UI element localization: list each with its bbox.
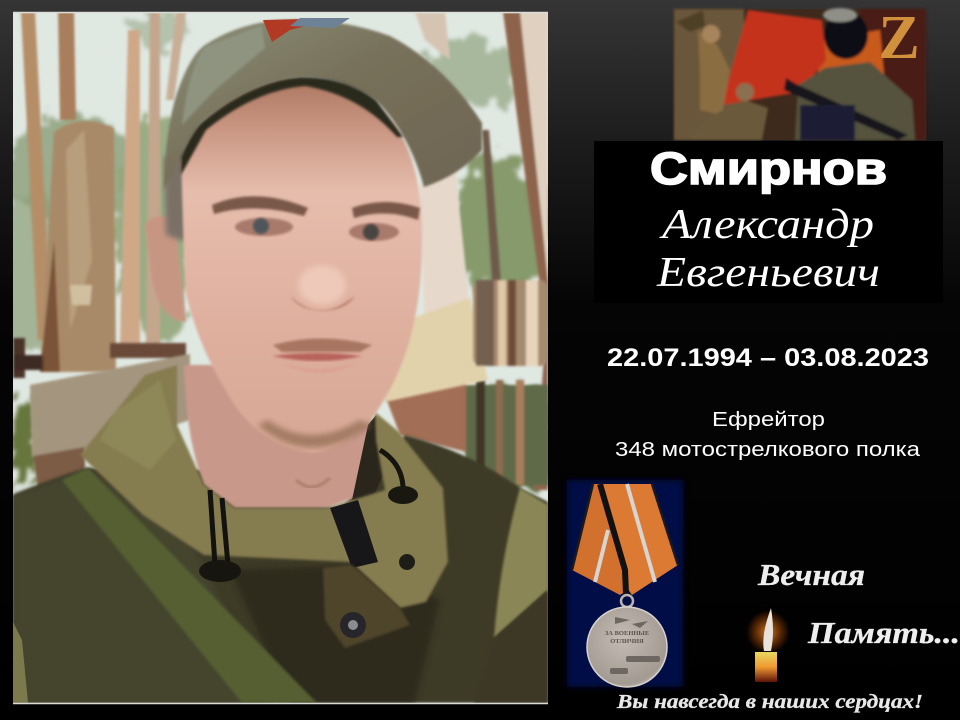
ribbon: [572, 484, 628, 595]
drawstrings and toggles: [199, 450, 418, 638]
name panel: [594, 141, 943, 303]
hood collar: [80, 365, 448, 608]
medal disc: [587, 607, 667, 687]
eyebrows: [212, 196, 308, 216]
log post: [40, 121, 116, 372]
ring: [621, 595, 633, 607]
caption: Вечная: Вечная: [757, 557, 865, 592]
chin stubble: [258, 420, 372, 448]
caption: Память: Память...: [807, 615, 960, 650]
medal relief: [610, 617, 660, 674]
forest foliage: [0, 12, 555, 495]
eyes: [235, 218, 293, 236]
banner image: soldiers and red flag: [674, 4, 926, 140]
letter Z: Z: [878, 4, 920, 72]
neck: [184, 365, 380, 508]
face: [145, 80, 422, 453]
bark and forest lower right: [386, 380, 548, 485]
moustache and lips: [273, 338, 372, 352]
first name: Александр: [659, 202, 874, 248]
jacket body: [13, 435, 548, 703]
photo frame edge: [13, 12, 548, 704]
rank and regiment: Ефрейтор: [712, 409, 825, 431]
cap: [164, 18, 482, 190]
life dates: 22.07.1994 – 03.08.2023: [607, 344, 929, 372]
wooden boards and pipe: [13, 280, 548, 488]
rank and regiment: [615, 409, 921, 461]
nose: [290, 296, 355, 311]
icon: candle: [746, 608, 790, 682]
caption: forever in our hearts: Вы навсегда в наших сердцах!: [616, 691, 923, 713]
rank and regiment: 348 мотострелкового полка: [615, 439, 921, 461]
panel: portrait photo: [0, 12, 555, 703]
icon: medal on blue background: [567, 480, 683, 687]
zipper: [330, 500, 378, 568]
shoulder strap: [62, 468, 317, 703]
medal inscription: ЗА ВОЕННЫЕ: [605, 630, 649, 637]
tree trunks: [21, 12, 548, 490]
surname: Смирнов: [650, 143, 887, 194]
icon: medal on blue background: ОТЛИЧИЯ: [610, 638, 644, 645]
pocket flap: [323, 565, 410, 648]
patronymic: Евгеньевич: [656, 250, 880, 296]
